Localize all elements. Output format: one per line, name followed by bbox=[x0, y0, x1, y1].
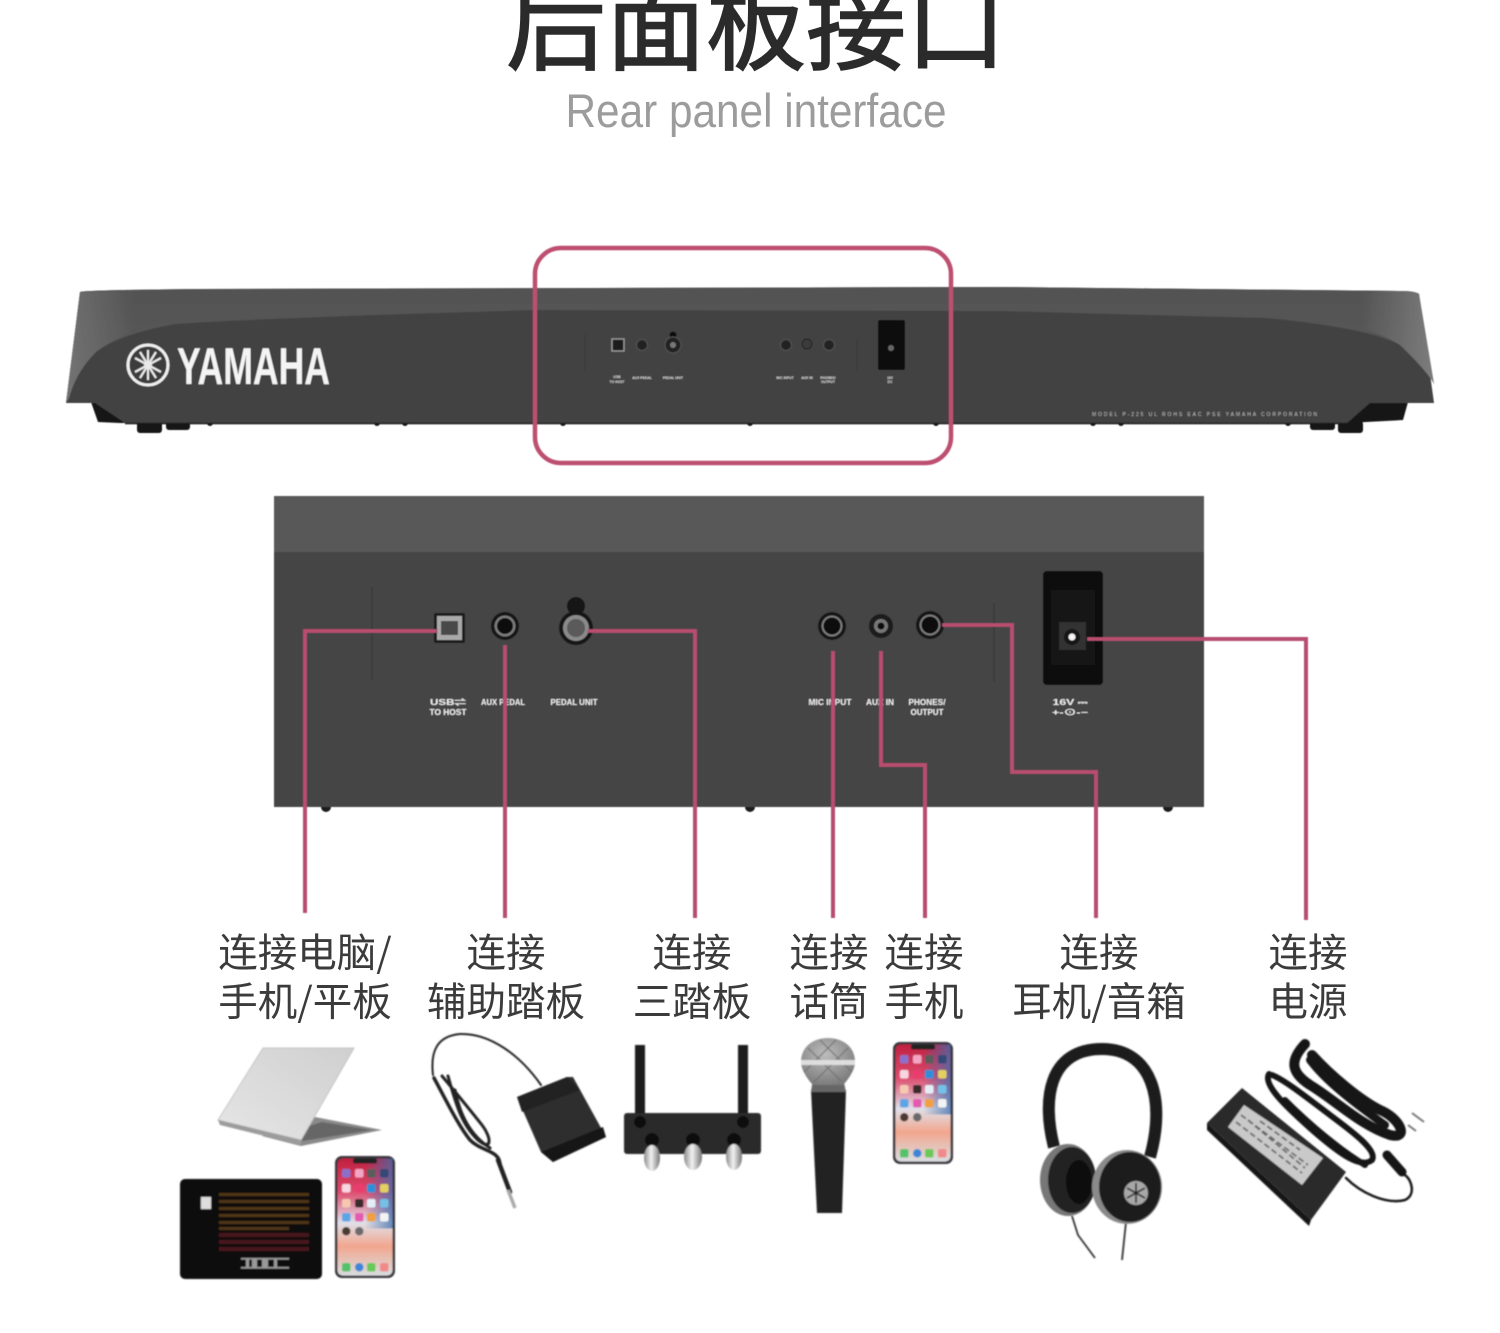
label: microphone: 连接 bbox=[790, 922, 868, 979]
icon: phone bbox=[893, 1042, 953, 1164]
keyboard port cluster bbox=[585, 320, 905, 384]
line: USB bbox=[305, 631, 437, 913]
keyboard port cluster: AUX PEDAL bbox=[632, 376, 652, 380]
label: pedal unit: 三踏板 bbox=[633, 971, 751, 1028]
pedal cord bbox=[432, 1034, 541, 1192]
port captions: 16V ⎓ bbox=[1052, 698, 1088, 707]
icon: laptop bbox=[218, 1048, 382, 1146]
keyboard port cluster: MIC INPUT bbox=[776, 376, 795, 380]
icon: phone with computer group bbox=[335, 1156, 395, 1278]
port captions: PEDAL UNIT bbox=[550, 698, 598, 707]
port captions: TO HOST bbox=[430, 708, 467, 717]
port captions bbox=[430, 698, 1089, 717]
connector lines bbox=[305, 625, 1306, 920]
port captions: MIC INPUT bbox=[808, 698, 852, 707]
label: aux pedal: 辅助踏板 bbox=[427, 971, 585, 1028]
port: mic input bbox=[818, 612, 846, 640]
keyboard port cluster: OUTPUT bbox=[821, 380, 836, 384]
callout: highlight frame bbox=[535, 248, 951, 463]
line: aux in bbox=[881, 651, 925, 918]
keyboard rear view bbox=[66, 287, 1434, 433]
panel feet bbox=[321, 802, 1173, 812]
keyboard body bbox=[66, 287, 1434, 423]
keyboard port cluster: DC bbox=[888, 380, 893, 384]
label: pedal unit: 连接 bbox=[652, 922, 732, 979]
label: phone: 连接 bbox=[884, 922, 964, 979]
keyboard feet bbox=[91, 402, 1408, 433]
icon: tablet bbox=[180, 1179, 322, 1279]
port captions: AUX PEDAL bbox=[481, 698, 525, 707]
label: power: 连接 bbox=[1268, 922, 1348, 979]
label: power: 电源 bbox=[1268, 971, 1348, 1028]
label: pedal unit bbox=[633, 922, 751, 1028]
port captions: +-⊙-− bbox=[1052, 708, 1089, 717]
label: microphone: 话筒 bbox=[790, 971, 868, 1028]
line: phones bbox=[942, 625, 1096, 918]
port: USB bbox=[434, 613, 465, 643]
line: power bbox=[1087, 639, 1306, 920]
label: headphones bbox=[1012, 922, 1186, 1028]
port: phones output bbox=[916, 611, 944, 639]
keyboard model text: MODEL P-225 UL ROHS EAC PSE YAMAHA CORPORATION bbox=[1092, 412, 1317, 418]
label: headphones: 连接 bbox=[1060, 922, 1138, 979]
line: mic bbox=[831, 651, 835, 918]
port: pedal unit bbox=[559, 597, 593, 645]
port captions: PHONES/ bbox=[908, 698, 946, 707]
line: AUX pedal bbox=[503, 645, 507, 918]
port captions: OUTPUT bbox=[910, 708, 944, 717]
subtitle: Rear panel interface bbox=[566, 84, 946, 137]
panel: enlarged rear panel bbox=[274, 496, 1204, 812]
Yamaha logo bbox=[128, 338, 330, 396]
icon: microphone bbox=[801, 1038, 855, 1213]
keyboard port cluster: PHONES/ bbox=[820, 376, 836, 380]
port captions: USB⇌ bbox=[430, 698, 467, 707]
label: phone bbox=[884, 922, 964, 1028]
label: computer: 手机/平板 bbox=[218, 971, 392, 1028]
icon: three pedal unit bbox=[624, 1045, 761, 1171]
label: aux pedal: 连接 bbox=[466, 922, 546, 979]
port: AUX pedal bbox=[491, 612, 519, 640]
port captions: AUX IN bbox=[866, 698, 894, 707]
label: phone: 手机 bbox=[884, 971, 964, 1028]
keyboard port cluster: TO HOST bbox=[609, 380, 625, 384]
panel top band bbox=[274, 496, 1204, 552]
icon: single pedal bbox=[432, 1034, 606, 1208]
panel body bbox=[274, 496, 1204, 807]
keyboard port cluster: USB bbox=[613, 375, 621, 379]
label: computer bbox=[218, 922, 392, 1028]
icon: headphones bbox=[1040, 1049, 1162, 1260]
label: computer: 连接电脑/ bbox=[218, 922, 392, 979]
keyboard top band bbox=[66, 287, 1434, 403]
label: power bbox=[1268, 922, 1348, 1028]
port: DC power bbox=[1043, 571, 1103, 685]
Yamaha logo: YAMAHA bbox=[177, 338, 330, 396]
label: aux pedal bbox=[427, 922, 585, 1028]
line: pedal unit bbox=[588, 631, 695, 918]
adapter cords bbox=[1268, 1044, 1412, 1201]
label: microphone bbox=[790, 922, 868, 1028]
port: aux in bbox=[869, 614, 893, 638]
icon: power adapter bbox=[1207, 1044, 1424, 1226]
keyboard port cluster: AUX IN bbox=[801, 376, 813, 380]
keyboard port cluster: 16V bbox=[887, 376, 894, 380]
keyboard port cluster: PEDAL UNIT bbox=[663, 376, 684, 380]
label: headphones: 耳机/音箱 bbox=[1012, 971, 1186, 1028]
